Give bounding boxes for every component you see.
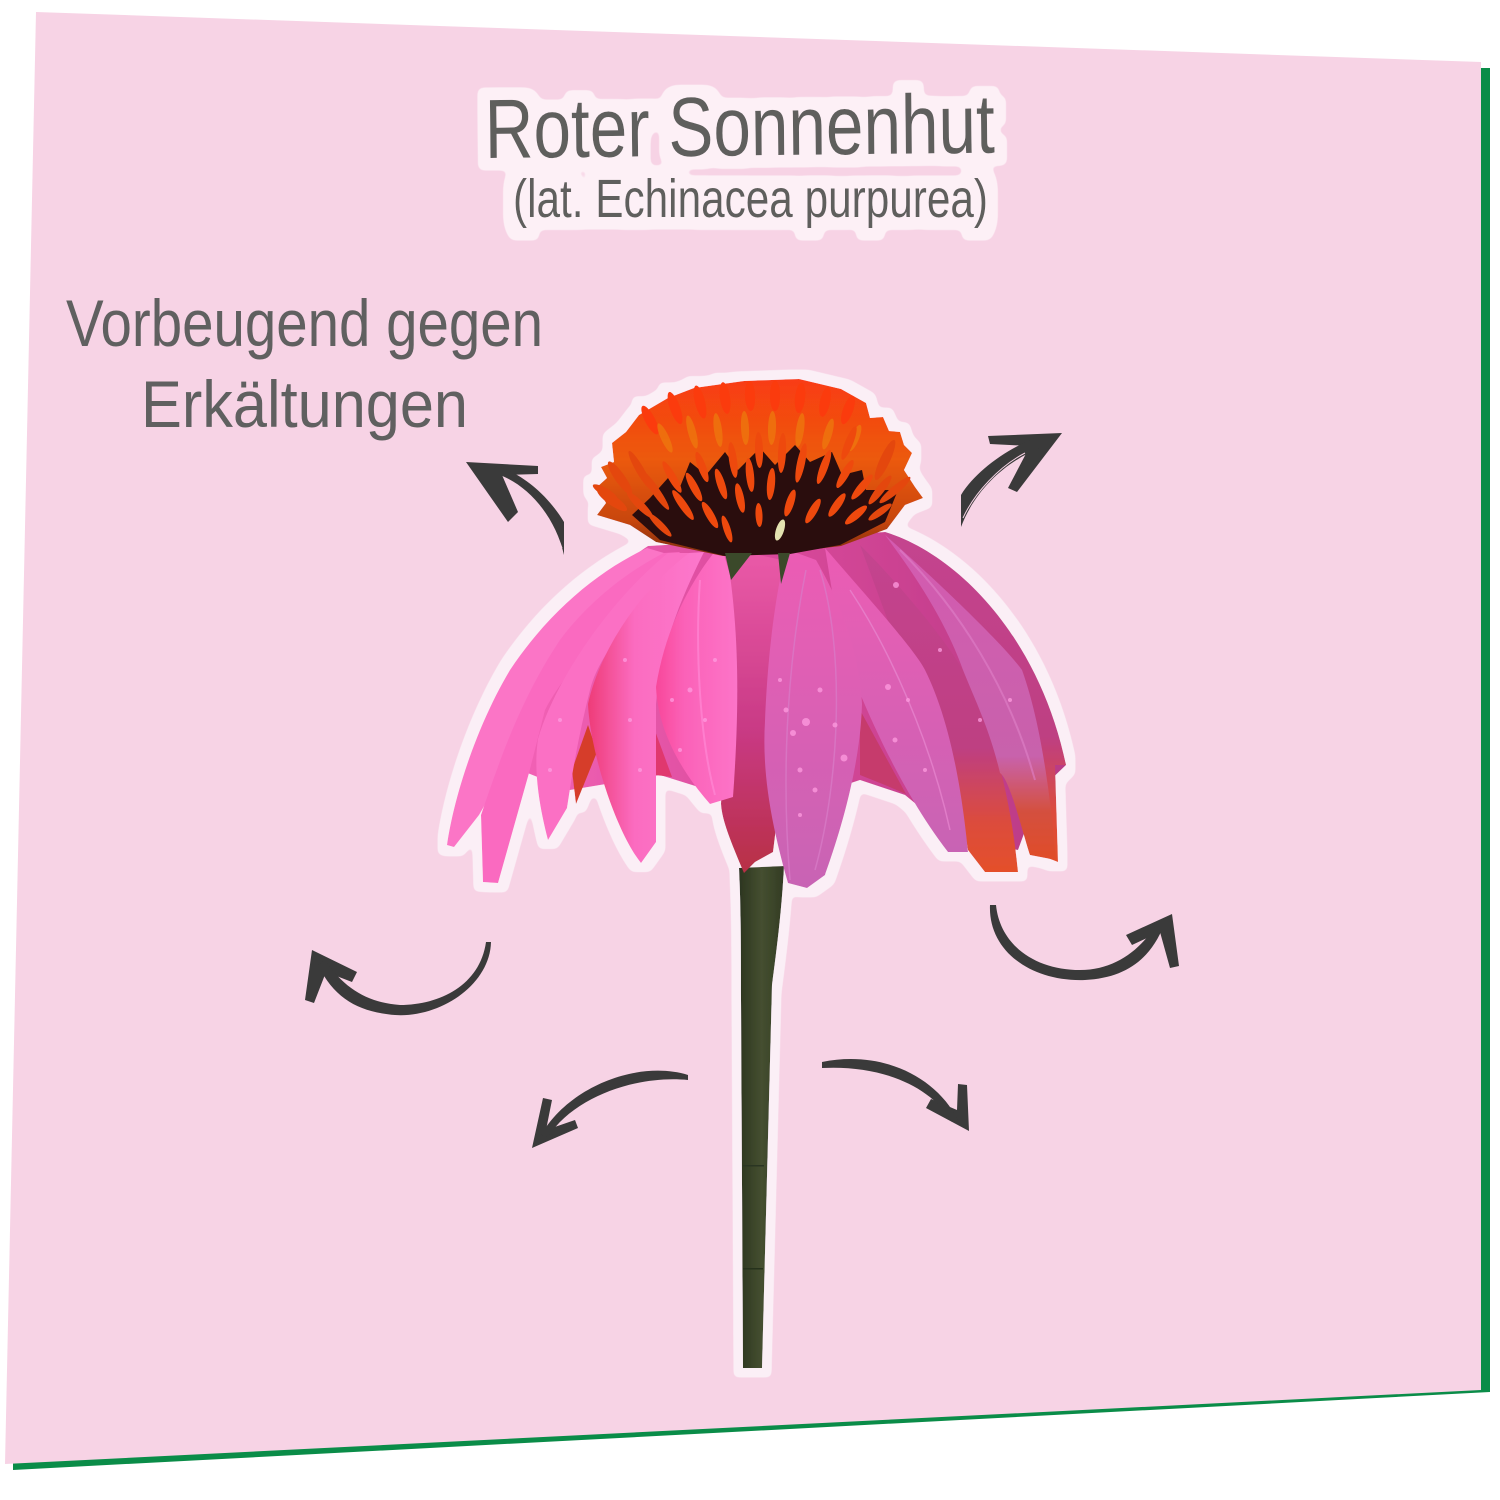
arrow: bottom left bbox=[532, 1071, 688, 1148]
petals bbox=[447, 532, 1066, 888]
callout: benefit text: Erkältungen bbox=[141, 367, 468, 441]
stem bbox=[739, 866, 784, 1368]
callout: benefit text: Vorbeugend gegen bbox=[66, 286, 543, 360]
flower illustration bbox=[447, 379, 1066, 1368]
arrow: top right bbox=[961, 433, 1062, 527]
arrow: bottom right bbox=[822, 1059, 969, 1131]
dark centre bbox=[632, 445, 898, 556]
title block bbox=[484, 77, 995, 229]
title block: (lat. Echinacea purpurea) bbox=[513, 169, 988, 229]
title block: Roter Sonnenhut bbox=[484, 77, 995, 176]
outer spikes bbox=[591, 438, 913, 539]
arrow: lower right bbox=[990, 905, 1179, 980]
seed cone bbox=[591, 379, 923, 584]
arrow: top left bbox=[466, 462, 564, 555]
water droplets bbox=[548, 582, 1012, 817]
stamens bbox=[660, 425, 875, 543]
dome texture bbox=[638, 381, 858, 436]
callout: benefit text bbox=[66, 286, 543, 441]
arrow: lower left bbox=[305, 942, 491, 1015]
